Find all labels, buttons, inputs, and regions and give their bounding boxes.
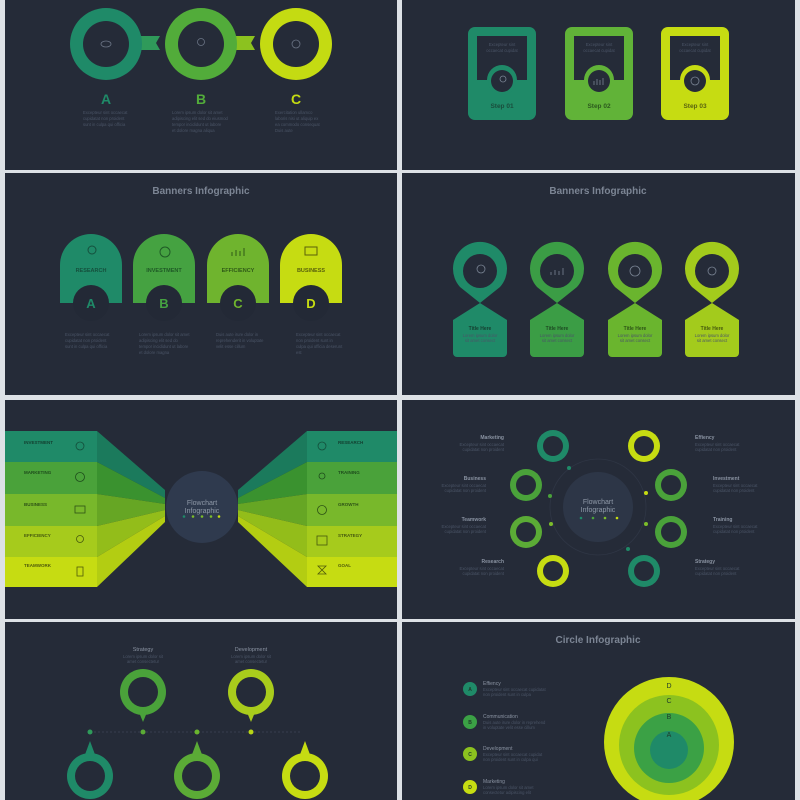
card step 02 xyxy=(565,27,633,120)
card step 01: occaecat cupidat xyxy=(486,48,519,53)
center circle: Flowchart xyxy=(187,500,217,507)
pin strategy xyxy=(120,647,166,722)
banner D xyxy=(280,234,342,321)
title: Circle Infographic xyxy=(555,635,641,646)
banner descriptions: et dolore magna xyxy=(139,350,170,355)
pin 2: Title Here xyxy=(546,326,569,332)
title: Banners Infographic xyxy=(152,186,250,197)
banner C: C xyxy=(233,296,243,311)
panel: radial flowchart: cupidatat non proident xyxy=(713,488,755,493)
panel: banners pins xyxy=(402,173,795,395)
center circle xyxy=(563,472,633,542)
descriptions ABC: Exercitation ullamco xyxy=(275,110,313,115)
panel: radial flowchart: cupidatat non proident xyxy=(713,529,755,534)
panel: bowtie flowchart xyxy=(5,400,397,619)
circle B xyxy=(165,8,237,80)
card step 01: Step 01 xyxy=(490,103,514,110)
legend: Lorem ipsum dolor sit amet xyxy=(483,785,534,790)
legend: Effiency xyxy=(483,681,501,687)
legend xyxy=(463,681,546,795)
nodes xyxy=(510,430,687,587)
panel: radial flowchart: Excepteur sint occaecat xyxy=(460,442,505,447)
pin 4: Title Here xyxy=(701,326,724,332)
legend: Development xyxy=(483,746,513,752)
labels ABC xyxy=(101,91,301,107)
pin 4: sit amet consect xyxy=(697,338,728,343)
card step 03: occaecat cupidat xyxy=(679,48,712,53)
pin 1: Lorem ipsum dolor xyxy=(463,333,498,338)
banner descriptions: Excepteur sint occaecat xyxy=(296,332,341,337)
panel: radial flowchart: cupidatat non proident xyxy=(445,529,487,534)
node labels: Marketing xyxy=(480,435,504,441)
panel: radial flowchart: cupidatat non proident xyxy=(695,447,737,452)
pin 4: Lorem ipsum dolor xyxy=(695,333,730,338)
banner descriptions: reprehenderit in voluptate xyxy=(216,338,264,343)
panel: radial flowchart: Excepteur sint occaecat xyxy=(442,483,487,488)
right bars: TRAINING xyxy=(338,470,360,475)
panel: radial flowchart: cupidatat non proident xyxy=(463,447,505,452)
legend: B xyxy=(468,720,472,726)
descriptions ABC xyxy=(83,110,321,133)
labels ABC: C xyxy=(291,91,301,107)
pin 1: sit amet consect xyxy=(465,338,496,343)
banner D: BUSINESS xyxy=(297,268,325,274)
panel: circles ABC xyxy=(5,0,397,170)
pin development: Development xyxy=(235,647,268,653)
banner descriptions xyxy=(65,332,343,355)
banner C xyxy=(207,234,269,321)
legend: non proident sunt in culpa xyxy=(483,692,532,697)
node labels: Business xyxy=(464,476,486,482)
panel: radial flowchart xyxy=(402,400,795,619)
right bars: GOAL xyxy=(338,563,351,568)
panel: radial flowchart: cupidatat non proident xyxy=(695,571,737,576)
left bars: MARKETING xyxy=(24,470,52,475)
left bars: TEAMWORK xyxy=(24,563,52,568)
banner descriptions: Excepteur sint occaecat xyxy=(65,332,110,337)
descriptions ABC: cupidatat non proident xyxy=(83,116,125,121)
title: Banners Infographic xyxy=(549,186,647,197)
node labels xyxy=(462,435,740,565)
banner A: A xyxy=(86,296,96,311)
left bars: EFFICIENCY xyxy=(24,533,51,538)
pin strategy: Lorem ipsum dolor sit xyxy=(123,654,164,659)
legend: Excepteur sint occaecat cupidatat xyxy=(483,687,546,692)
descriptions ABC: et dolore magna aliqua xyxy=(172,128,215,133)
legend: non proident sunt in culpa qui xyxy=(483,757,538,762)
panel: radial flowchart: Excepteur sint occaecat xyxy=(442,524,487,529)
panel: steps cards xyxy=(402,0,795,170)
descriptions ABC: tempor incididunt ut labore xyxy=(172,122,222,127)
legend: Excepteur sint occaecat cupidat xyxy=(483,752,543,757)
pin strategy: amet consectetur xyxy=(127,659,160,664)
panel: radial flowchart: cupidatat non proident xyxy=(463,571,505,576)
panel: banners ABCD xyxy=(5,173,397,395)
left bars: INVESTMENT xyxy=(24,440,53,445)
center circle: Infographic xyxy=(185,508,220,515)
panel: radial flowchart: Excepteur sint occaecat xyxy=(695,442,740,447)
center circle: Flowchart xyxy=(583,499,613,506)
banner B: INVESTMENT xyxy=(146,268,182,274)
panel: radial flowchart: Excepteur sint occaecat xyxy=(460,566,505,571)
pin 2: sit amet consect xyxy=(542,338,573,343)
banner A: RESEARCH xyxy=(76,268,106,274)
node labels: Strategy xyxy=(695,559,715,565)
legend: consectetur adipiscing elit xyxy=(483,790,532,795)
card step 03 xyxy=(661,27,729,120)
pin 3: Title Here xyxy=(624,326,647,332)
circle C xyxy=(260,8,332,80)
card step 01: Excepteur sint xyxy=(489,42,516,47)
banner A xyxy=(60,234,122,321)
banner C: EFFICIENCY xyxy=(222,268,255,274)
right bars: STRATEGY xyxy=(338,533,362,538)
banner descriptions: velit esse cillum xyxy=(216,344,246,349)
panel: radial flowchart: Excepteur sint occaecat xyxy=(713,524,758,529)
descriptions ABC: Duis aute xyxy=(275,128,293,133)
banner descriptions: sunt in culpa qui officia xyxy=(65,344,108,349)
banner B: B xyxy=(159,296,169,311)
legend: Marketing xyxy=(483,779,505,785)
banner B xyxy=(133,234,195,321)
node labels: Teamwork xyxy=(462,517,486,523)
bottom pins xyxy=(67,741,328,799)
panel: radial flowchart: cupidatat non proident xyxy=(445,488,487,493)
labels ABC: A xyxy=(101,91,111,107)
left bars xyxy=(5,431,97,587)
card step 02: Step 02 xyxy=(587,103,611,110)
legend: D xyxy=(468,785,472,791)
descriptions ABC: Lorem ipsum dolor sit amet xyxy=(172,110,223,115)
pin 3: Lorem ipsum dolor xyxy=(618,333,653,338)
concentric circles: B xyxy=(667,714,672,721)
arrow connectors xyxy=(135,36,255,50)
pin development: Lorem ipsum dolor sit xyxy=(231,654,272,659)
descriptions ABC: Excepteur sint occaecat xyxy=(83,110,128,115)
banner D: D xyxy=(306,296,316,311)
banner descriptions: cupidatat non proident xyxy=(65,338,107,343)
node labels: Research xyxy=(481,559,504,565)
banner descriptions: Lorem ipsum dolor sit amet xyxy=(139,332,190,337)
pin 3: sit amet consect xyxy=(620,338,651,343)
panel: circle infographic xyxy=(402,622,795,800)
banner descriptions: adipiscing elit sed do xyxy=(139,338,179,343)
card step 02: occaecat cupidat xyxy=(583,48,616,53)
legend: in voluptate velit esse cillum xyxy=(483,725,535,730)
legend: C xyxy=(468,752,472,758)
descriptions ABC: laboris nisi ut aliquip ex xyxy=(275,116,319,121)
concentric circles: C xyxy=(666,698,672,705)
legend: Communication xyxy=(483,714,518,720)
pin 2: Lorem ipsum dolor xyxy=(540,333,575,338)
descriptions ABC: sunt in culpa qui officia xyxy=(83,122,126,127)
node labels: Effiency xyxy=(695,435,715,441)
card step 03: Step 03 xyxy=(683,103,707,110)
circle A xyxy=(70,8,142,80)
pin development: amet consectetur xyxy=(235,659,268,664)
center circle: Infographic xyxy=(581,507,616,514)
labels ABC: B xyxy=(196,91,206,107)
banner descriptions: non proident sunt in xyxy=(296,338,333,343)
legend: A xyxy=(468,687,472,693)
card step 03: Excepteur sint xyxy=(682,42,709,47)
panel: radial flowchart: Excepteur sint occaecat xyxy=(695,566,740,571)
card step 02: Excepteur sint xyxy=(586,42,613,47)
center circle xyxy=(166,471,238,543)
pin 1: Title Here xyxy=(469,326,492,332)
descriptions ABC: ea commodo consequat xyxy=(275,122,321,127)
right bars: RESEARCH xyxy=(338,440,363,445)
banner descriptions: culpa qui officia deserunt xyxy=(296,344,343,349)
right fan xyxy=(238,431,307,587)
banner descriptions: Duis aute irure dolor in xyxy=(216,332,259,337)
descriptions ABC: adipiscing elit sed do eiusmod xyxy=(172,116,229,121)
pin 2 xyxy=(530,242,584,357)
concentric circles xyxy=(604,677,734,800)
concentric circles: A xyxy=(667,732,672,739)
banner descriptions: tempor incididunt ut labore xyxy=(139,344,189,349)
node labels: Investment xyxy=(713,476,740,482)
left fan xyxy=(97,431,165,587)
pin 4 xyxy=(685,242,739,357)
banner descriptions: est xyxy=(296,350,302,355)
pin 1 xyxy=(453,242,507,357)
pin development xyxy=(228,647,274,722)
legend: Duis aute irure dolor in reprehend xyxy=(483,720,546,725)
right bars xyxy=(307,431,397,587)
left bars: BUSINESS xyxy=(24,502,47,507)
node labels: Training xyxy=(713,517,732,523)
panel: timeline pins xyxy=(5,622,397,800)
concentric circles: D xyxy=(666,683,672,690)
timeline dots xyxy=(88,730,254,734)
panel: radial flowchart: Excepteur sint occaecat xyxy=(713,483,758,488)
right bars: GROWTH xyxy=(338,502,358,507)
pin strategy: Strategy xyxy=(133,647,153,653)
pin 3 xyxy=(608,242,662,357)
card step 01 xyxy=(468,27,536,120)
